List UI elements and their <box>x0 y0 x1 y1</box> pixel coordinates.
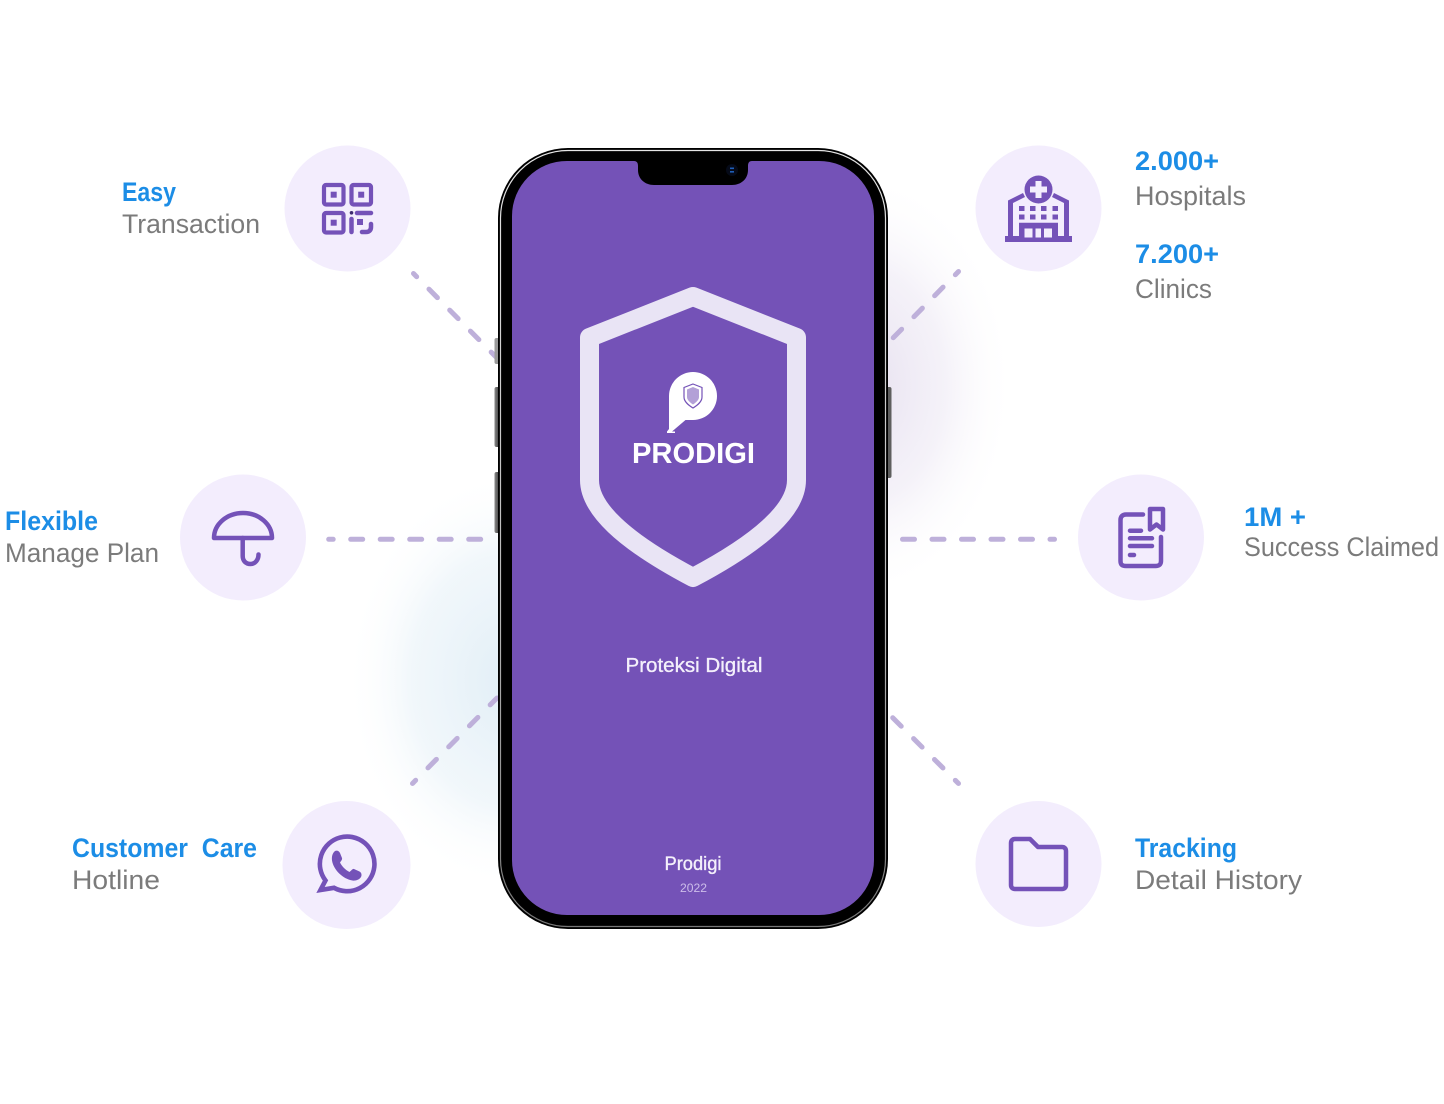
label: 1M + <box>1244 502 1306 532</box>
screen footer name: Prodigi <box>664 854 722 875</box>
feature: flexible manage plan <box>5 474 306 600</box>
feature: tracking detail history <box>976 801 1303 927</box>
icon circle <box>976 146 1102 272</box>
screen footer year: 2022 <box>680 881 707 895</box>
label: Hotline <box>72 865 160 895</box>
icon: whatsapp <box>320 837 374 891</box>
icon circle <box>282 801 410 929</box>
icon: umbrella <box>214 513 272 564</box>
connector: easy transaction <box>414 274 497 358</box>
feature: success claimed <box>1078 474 1439 600</box>
label <box>1135 146 1246 304</box>
phone <box>494 148 892 929</box>
icon: hospital <box>1005 176 1072 242</box>
label: Tracking <box>1135 833 1237 863</box>
label <box>72 833 257 895</box>
feature: customer care hotline <box>72 801 410 929</box>
label: Manage Plan <box>5 538 159 568</box>
connector: hospitals and clinics <box>891 272 958 340</box>
label: Transaction <box>122 209 260 239</box>
phone body <box>498 148 888 929</box>
icon: folder <box>1011 839 1066 889</box>
feature: hospitals and clinics <box>976 146 1246 304</box>
label: 2.000+ <box>1135 146 1219 176</box>
icon circle <box>284 146 410 272</box>
label: Hospitals <box>1135 181 1246 211</box>
feature: easy transaction <box>122 146 410 272</box>
connector: customer care <box>412 698 497 784</box>
prodigi logo mark <box>667 372 717 433</box>
notch <box>634 161 752 185</box>
connector: tracking <box>891 716 958 784</box>
shield outline <box>590 296 796 578</box>
phone screen <box>512 161 874 915</box>
label <box>122 177 260 239</box>
label: Clinics <box>1135 274 1212 304</box>
phone side buttons <box>494 338 892 533</box>
label <box>1135 833 1303 895</box>
label: 7.200+ <box>1135 239 1219 269</box>
label: Customer Care <box>72 833 257 863</box>
icon: document with bookmark <box>1120 509 1163 566</box>
camera <box>726 164 738 176</box>
prodigi wordmark: PRODIGI <box>632 438 755 470</box>
label <box>5 506 159 568</box>
icon circle <box>1078 474 1204 600</box>
label: Easy <box>122 177 176 207</box>
phone rim highlight <box>500 150 886 926</box>
label: Flexible <box>5 506 98 536</box>
label: Detail History <box>1135 865 1303 895</box>
icon circle <box>976 801 1102 927</box>
icon: qr code <box>324 185 371 232</box>
icon circle <box>180 474 306 600</box>
connector: flexible plan <box>329 537 490 542</box>
screen title: Proteksi Digital <box>626 655 762 677</box>
label <box>1244 502 1439 562</box>
connector: success claimed <box>900 537 1054 542</box>
